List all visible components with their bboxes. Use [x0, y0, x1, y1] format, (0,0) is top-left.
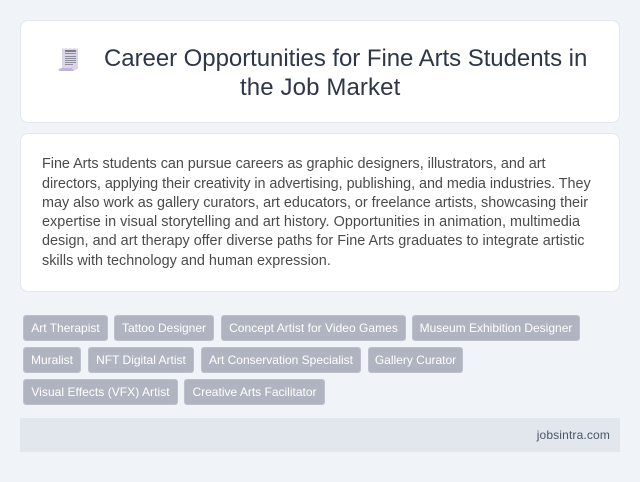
- panel: title card: [20, 20, 620, 123]
- description text: design, and art therapy offer diverse paths for Fine Arts graduates to integrate artistic: [42, 233, 585, 249]
- icon: scroll document: [58, 48, 78, 71]
- tag: Concept Artist for Video Games: Concept Artist for Video Games: [229, 321, 398, 335]
- tag: Art Therapist: Art Therapist: [31, 321, 100, 335]
- tag: Tattoo Designer: Tattoo Designer: [122, 321, 206, 335]
- description text: expertise in visual storytelling and art history. Opportunities in animation, multimedia: [42, 214, 580, 230]
- tag: NFT Digital Artist: [88, 347, 194, 373]
- tag: Visual Effects (VFX) Artist: Visual Effects (VFX) Artist: [31, 385, 170, 399]
- tag: Art Conservation Specialist: Art Conservation Specialist: [209, 353, 353, 367]
- tag: Creative Arts Facilitator: [184, 379, 325, 405]
- description text: may also work as gallery curators, art educators, or freelance artists, showcasing their: [42, 194, 588, 210]
- description text: Fine Arts students can pursue careers as graphic designers, illustrators, and art: [42, 156, 546, 172]
- tag: Muralist: Muralist: [31, 353, 73, 367]
- title: [104, 45, 587, 101]
- footer bar: [20, 418, 620, 452]
- tag: Visual Effects (VFX) Artist: [23, 379, 178, 405]
- tag: Gallery Curator: [368, 347, 463, 373]
- text: Career Opportunities for Fine Arts Students in: [104, 45, 587, 72]
- tag: Art Therapist: [23, 315, 108, 341]
- tag: Concept Artist for Video Games: [221, 315, 406, 341]
- tag list: [23, 315, 580, 405]
- description text: [42, 156, 591, 268]
- tag: Art Conservation Specialist: [201, 347, 361, 373]
- text: the Job Market: [240, 74, 400, 101]
- tag: Museum Exhibition Designer: [412, 315, 580, 341]
- panel: description: [20, 133, 620, 292]
- footer source text: jobsintra.com: [537, 428, 610, 442]
- tag: Muralist: [23, 347, 81, 373]
- tag: Tattoo Designer: [114, 315, 214, 341]
- description text: directors, applying their creativity in advertising, publishing, and media industries. They: [42, 176, 591, 192]
- tag: Gallery Curator: Gallery Curator: [375, 353, 456, 367]
- tag: Creative Arts Facilitator: Creative Arts Facilitator: [192, 385, 317, 399]
- tag: NFT Digital Artist: NFT Digital Artist: [96, 353, 186, 367]
- description text: skills with technology and human expression.: [42, 252, 331, 268]
- tag: Museum Exhibition Designer: Museum Exhibition Designer: [420, 321, 572, 335]
